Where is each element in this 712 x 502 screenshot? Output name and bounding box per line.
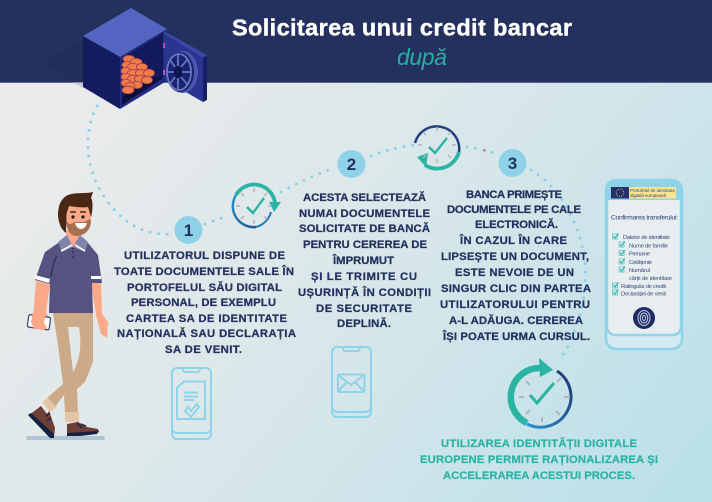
header band	[0, 0, 712, 83]
step 2 text: NUMAI DOCUMENTELE	[299, 208, 430, 220]
icon: clock 3	[511, 358, 571, 427]
safe dial	[166, 51, 198, 93]
step 3 text: BANCA PRIMEȘTE	[466, 189, 562, 201]
conclusion text: ACCELERAREA ACESTUI PROCES.	[443, 470, 635, 482]
step 3 text: LIPSEȘTE UN DOCUMENT,	[441, 251, 589, 263]
step 3 text: SINGUR CLIC DIN PARTEA	[441, 283, 591, 295]
step 3 text: DOCUMENTELE PE CALE	[447, 204, 581, 216]
checklist: Datelor de identitate	[623, 235, 670, 241]
step 1 text	[114, 250, 296, 356]
step 2 text: UȘURINȚĂ ÎN CONDIȚII	[298, 286, 431, 299]
title: Solicitarea unui credit bancar	[232, 14, 572, 40]
wallet label	[629, 187, 676, 198]
icon: open safe with coins	[42, 8, 207, 109]
trousers	[47, 313, 93, 413]
step 2 text: DEPLINĂ.	[337, 317, 391, 330]
subtitle: după	[397, 44, 447, 70]
step 1 text: UTILIZATORUL DISPUNE DE	[124, 250, 285, 262]
step 2 text: ACESTA SELECTEAZĂ	[303, 191, 426, 204]
step 2 text	[298, 191, 431, 330]
step 2 text: SOLICITATE DE BANCĂ	[299, 222, 430, 235]
wallet label: Portofelul de identitate	[630, 188, 675, 193]
checklist: Cetățenie	[629, 260, 652, 266]
shoes	[29, 406, 55, 437]
step 1 badge	[174, 216, 202, 244]
step 1 text: PERSONAL, DE EXEMPLU	[131, 297, 276, 309]
checklist: Numărul	[629, 268, 650, 274]
checklist: Declarației de venit	[621, 292, 666, 298]
shirt	[35, 243, 102, 313]
checklist	[612, 234, 672, 298]
ground shadow	[26, 436, 105, 440]
hair	[58, 192, 93, 233]
step 2 badge: 2	[347, 155, 356, 174]
confirmation heading: Confirmarea transferului:	[611, 214, 678, 222]
eu flag	[611, 187, 629, 198]
step 1 text: TOATE DOCUMENTELE SALE ÎN	[114, 265, 294, 278]
icon: fingerprint	[633, 307, 655, 329]
conclusion text	[420, 437, 658, 482]
coins	[121, 55, 154, 94]
icon: phone with document	[172, 368, 211, 439]
step 3 text: ÎN CAZUL ÎN CARE	[459, 234, 567, 247]
step 3 text: ESTE NEVOIE DE UN	[455, 267, 574, 279]
step 2 text: ȘI LE TRIMITE CU	[311, 271, 417, 283]
arms	[32, 281, 50, 330]
step 3 text	[440, 189, 591, 343]
step 3 badge	[498, 149, 526, 177]
step 1 text: SA DE VENIT.	[165, 344, 242, 356]
step 2 badge	[338, 150, 366, 178]
dotted path	[88, 106, 586, 361]
step 1 badge: 1	[184, 221, 193, 240]
illustration: man holding phone	[26, 192, 108, 440]
conclusion text: EUROPENE PERMITE RAȚIONALIZAREA ȘI	[420, 454, 658, 466]
step 1 text: NAȚIONALĂ SAU DECLARAȚIA	[117, 327, 296, 340]
step 3 text: ELECTRONICĂ.	[475, 218, 558, 231]
checklist: Prenume	[629, 252, 650, 258]
checklist: cărții de identitate	[629, 276, 672, 282]
step 3 badge: 3	[508, 154, 517, 173]
wallet label: digitală europeană	[630, 193, 666, 198]
icon: clock 1	[233, 185, 281, 227]
icon: clock 2	[415, 126, 459, 169]
head	[66, 204, 91, 235]
step 3 text: UTILIZATORULUI PENTRU	[440, 299, 590, 311]
conclusion text: UTILIZAREA IDENTITĂȚII DIGITALE	[441, 437, 637, 450]
step 3 text: ÎȘI POATE URMA CURSUL.	[442, 330, 590, 343]
step 3 text: A-L ADĂUGA. CEREREA	[449, 314, 583, 327]
icon: phone with envelope	[332, 347, 371, 417]
neck and collar	[66, 230, 81, 248]
step 2 text: ÎMPRUMUT	[332, 254, 394, 267]
step 2 text: PENTRU CEREREA DE	[303, 239, 427, 251]
checklist: Ratingului de credit	[621, 284, 666, 290]
step 2 text: DE SECURITATE	[316, 303, 412, 315]
checklist: Nume de familie	[629, 244, 668, 250]
step 1 text: CARTEA SA DE IDENTITATE	[126, 313, 287, 325]
step 1 text: PORTOFELUL SĂU DIGITAL	[127, 281, 282, 294]
phone	[27, 315, 51, 330]
panel: wallet phone	[606, 180, 682, 349]
